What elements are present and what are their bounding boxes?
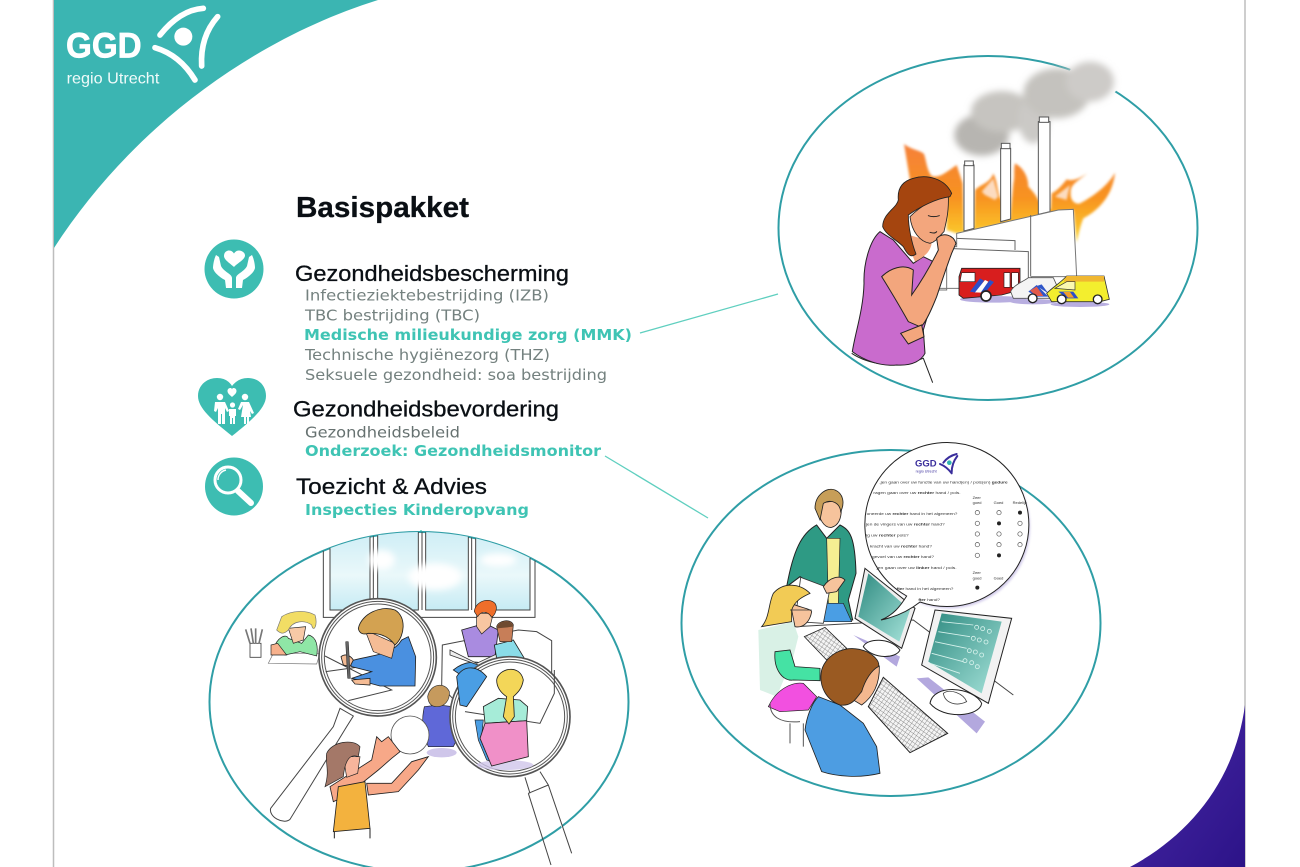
section: Gezondheidsbescherming: Seksuele gezondheid: soa bestrijding (305, 366, 607, 384)
illustration circle: Gezondheidsmonitor computer class: GGD (915, 459, 937, 469)
illustration circle: Gezondheidsmonitor computer class: Redelijk (1013, 500, 1027, 505)
illustration circle: Gezondheidsmonitor computer class: kracht van uw rechter hand? (870, 543, 933, 548)
teacher (787, 525, 856, 620)
illustration circle: Gezondheidsmonitor computer class: ,jen gaan over uw functie van uw hand(en) / pols(en) gedure (879, 479, 1009, 484)
screen 2 (922, 610, 1012, 703)
standing girl (330, 737, 400, 802)
illustration circle: Gezondheidsmonitor computer class: Zeer (973, 570, 982, 575)
flames (904, 144, 1115, 243)
magnifier 1 handle (270, 708, 353, 821)
speech bubble survey (868, 446, 1030, 608)
illustration circle: Gezondheidsmonitor computer class: fter hand in het algemeen? (897, 586, 954, 591)
section: Toezicht & Advies (296, 474, 529, 519)
teal corner banner with logo (54, 0, 378, 248)
illustration circle: Gezondheidsmonitor computer class: Zeer (973, 495, 982, 500)
keyboards (804, 627, 847, 660)
section: Gezondheidsbescherming: TBC bestrijding (TBC) (304, 306, 480, 324)
screen 1 (855, 568, 915, 648)
illustration circle: Gezondheidsmonitor computer class: jen de vingers van uw rechter hand? (865, 522, 946, 527)
section: Gezondheidsbescherming: Gezondheidsbescherming (295, 261, 569, 286)
section: Toezicht & Advies: Inspecties Kinderopvang (305, 501, 529, 519)
illustration circle: Gezondheidsmonitor computer class: gevoel van uw rechter hand? (872, 554, 935, 559)
magnifier 1 lens (319, 599, 436, 716)
smoke (1067, 59, 1120, 101)
title: Basispakket (296, 192, 469, 224)
illustration circle: Inspecties Kinderopvang (210, 523, 628, 867)
seated child (423, 705, 463, 747)
illustration circle: Gezondheidsmonitor computer class: ragen gaan over uw rechter hand / pols. (873, 490, 961, 495)
woman and toddler on sofa (442, 630, 552, 723)
fire truck (960, 296, 1027, 303)
illustration circle: MMK factory fire (778, 56, 1198, 400)
ball (391, 716, 429, 754)
ambulance (1051, 302, 1109, 307)
woman (852, 353, 933, 383)
girl at table (268, 653, 320, 664)
boy (805, 697, 880, 776)
icon: magnifying glass (205, 458, 263, 516)
section: Gezondheidsbescherming (295, 261, 632, 384)
factory (937, 209, 1077, 290)
illustration circle: Gezondheidsmonitor computer class (682, 443, 1100, 796)
logo: GGD regio Utrecht: regio Utrecht (67, 70, 160, 87)
section: Toezicht & Advies: Toezicht & Advies (296, 474, 487, 499)
police car (1010, 299, 1057, 304)
purple corner (1130, 705, 1245, 867)
illustration circle: Gezondheidsmonitor computer class: oneerde uw rechter hand in het algemeen? (867, 511, 958, 516)
desk (797, 620, 1013, 695)
illustration circle: Gezondheidsmonitor computer class: goed (973, 575, 982, 580)
section: Gezondheidsbevordering (293, 396, 602, 460)
magnifier 2 (525, 772, 572, 865)
illustration circle: Gezondheidsmonitor computer class: goed (973, 500, 982, 505)
section: Gezondheidsbevordering: Gezondheidsbevordering (293, 396, 559, 422)
section: Gezondheidsbescherming: Infectieziektebestrijding (IZB) (305, 286, 549, 304)
connector lines (421, 294, 778, 541)
illustration circle: Gezondheidsmonitor computer class: fter hand? (918, 597, 941, 602)
illustration circle: Gezondheidsmonitor computer class: Goed (994, 500, 1003, 505)
section: Gezondheidsbescherming: Technische hygiënezorg (THZ) (304, 346, 550, 364)
section: Gezondheidsbescherming: Medische milieukundige zorg (MMK) (304, 326, 632, 344)
illustration circle: Gezondheidsmonitor computer class: regio Utrecht (916, 470, 937, 474)
logo: GGD regio Utrecht (66, 8, 218, 87)
icon: hands with heart (204, 240, 264, 298)
illustration circle: Gezondheidsmonitor computer class: Goed (994, 575, 1003, 580)
chimneys (964, 117, 1050, 231)
illustration circle: Gezondheidsmonitor computer class: ig uw rechter pols? (866, 533, 910, 538)
illustration circle: Gezondheidsmonitor computer class: jen gaan over uw linker hand / pols. (875, 565, 957, 570)
section: Gezondheidsbevordering: Onderzoek: Gezondheidsmonitor (305, 442, 602, 460)
windows (323, 523, 535, 617)
logo: GGD regio Utrecht: GGD (66, 26, 142, 65)
icon: family in heart (198, 378, 266, 436)
section: Gezondheidsbevordering: Gezondheidsbeleid (305, 424, 460, 442)
girl (758, 622, 798, 697)
